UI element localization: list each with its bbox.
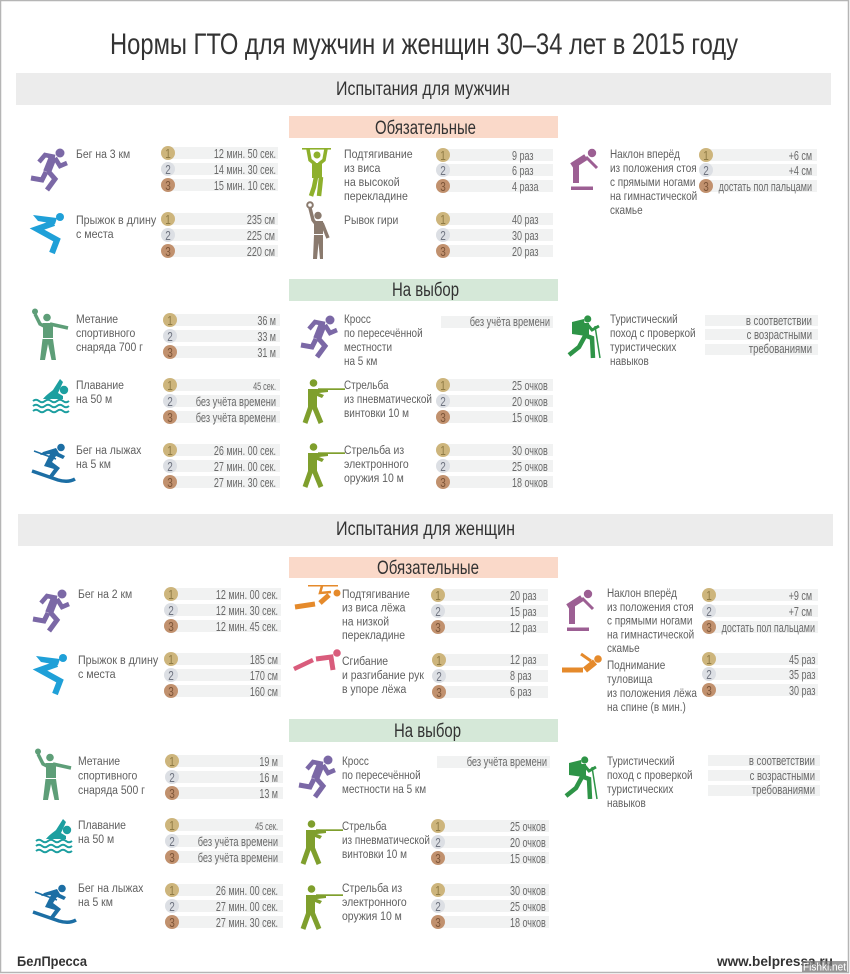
test: low pull-ups women: 3: [435, 622, 441, 635]
test: run 3 km men: Бег на 3 км: [76, 148, 130, 161]
test: cross men: местности: [344, 341, 392, 354]
panel: men header: Испытания для мужчин: [336, 79, 510, 100]
test: push-ups women: 8 раз: [510, 670, 532, 683]
test: air rifle men: [305, 378, 553, 425]
test: long jump women: [36, 652, 281, 699]
test: low pull-ups women: 2: [435, 606, 441, 619]
test: swim men: 2: [167, 396, 173, 409]
test: electronic rifle men: 25 очков: [512, 461, 548, 474]
test: pull-ups men: 2: [440, 165, 446, 178]
test: electronic rifle men: 2: [440, 461, 446, 474]
test: push-ups women: и разгибание рук: [342, 669, 424, 682]
test: bend women: +7 см: [789, 606, 812, 619]
test: long jump men: Прыжок в длину: [76, 214, 156, 227]
test: throw men: 3: [167, 347, 173, 360]
test: electronic rifle men: 1: [440, 445, 446, 458]
test: pull-ups men: [302, 148, 553, 203]
test: low pull-ups women: 15 раз: [510, 606, 537, 619]
test: push-ups women: в упоре лёжа: [342, 683, 407, 696]
test: throw men: 36 м: [257, 315, 276, 328]
test: throw women: 3: [169, 788, 175, 801]
test: sit-ups women: 35 раз: [789, 669, 816, 682]
test: electronic rifle women: [303, 882, 549, 930]
test: throw women: 19 м: [259, 756, 278, 769]
test: electronic rifle women: электронного: [342, 896, 407, 909]
test: run 3 km men: 15 мин. 10 сек.: [214, 180, 276, 193]
test: sit-ups women: 45 раз: [789, 654, 816, 667]
test: electronic rifle women: 25 очков: [510, 901, 546, 914]
test: swim men: [33, 378, 280, 425]
test: pull-ups men: из виса: [344, 162, 381, 175]
test: long jump men: 3: [165, 246, 171, 259]
men optional heading: [289, 279, 558, 301]
test: bend women: на гимнастической: [607, 629, 694, 642]
men optional heading: На выбор: [392, 280, 459, 301]
women mandatory heading: Обязательные: [377, 558, 479, 579]
test: air rifle men: винтовки 10 м: [344, 407, 409, 420]
test: electronic rifle men: [305, 443, 553, 490]
test: ski women: на 5 км: [78, 896, 113, 909]
test: ski women: 27 мин. 30 сек.: [216, 917, 278, 930]
test: swim women: [36, 818, 283, 865]
test: long jump men: с места: [76, 228, 114, 241]
test: air rifle women: Стрельба: [342, 820, 386, 833]
test: throw men: [32, 308, 280, 360]
test: swim men: на 50 м: [76, 393, 112, 406]
test: long jump men: 1: [165, 214, 171, 227]
test: electronic rifle women: Стрельба из: [342, 882, 402, 895]
test: cross women: местности на 5 км: [342, 783, 426, 796]
test: swim women: на 50 м: [78, 833, 114, 846]
test: run 2 km women: 2: [168, 605, 174, 618]
test: low pull-ups women: 12 раз: [510, 622, 537, 635]
test: electronic rifle men: электронного: [344, 458, 409, 471]
test: bend men: 2: [703, 165, 709, 178]
test: air rifle men: 1: [440, 380, 446, 393]
test: run 3 km men: 2: [165, 164, 171, 177]
panel: men header: [16, 73, 831, 105]
test: hiking men: туристических: [610, 341, 677, 354]
test: hiking women: с возрастными: [750, 770, 815, 783]
test: hiking women: поход с проверкой: [607, 769, 693, 782]
test: bend women: +9 см: [789, 590, 812, 603]
icon: push-up: [294, 649, 341, 670]
test: run 2 km women: 3: [168, 621, 174, 634]
test: electronic rifle men: оружия 10 м: [344, 472, 404, 485]
test: run 3 km men: 12 мин. 50 сек.: [214, 148, 276, 161]
test: run 2 km women: 12 мин. 45 сек.: [216, 621, 278, 634]
test: air rifle men: Стрельба: [344, 379, 388, 392]
test: swim women: 1: [169, 820, 175, 833]
test: ski women: 3: [169, 917, 175, 930]
test: long jump men: [33, 212, 278, 259]
test: ski men: Бег на лыжах: [76, 444, 141, 457]
test: ski women: 1: [169, 885, 175, 898]
test: air rifle women: 25 очков: [510, 821, 546, 834]
test: throw men: снаряда 700 г: [76, 341, 143, 354]
test: low pull-ups women: перекладине: [342, 629, 405, 642]
test: air rifle women: 1: [435, 821, 441, 834]
test: bend men: [571, 148, 817, 217]
test: swim women: Плавание: [78, 819, 126, 832]
test: cross women: без учёта времени: [467, 756, 547, 769]
test: hiking men: Туристический: [610, 313, 678, 326]
test: sit-ups women: Поднимание: [607, 659, 665, 672]
test: low pull-ups women: из виса лёжа: [342, 602, 406, 615]
test: air rifle men: 25 очков: [512, 380, 548, 393]
test: bend women: из положения стоя: [607, 601, 694, 614]
watermark: Fishki.net: [803, 962, 846, 974]
test: long jump women: 3: [168, 686, 174, 699]
test: sit-ups women: 1: [706, 654, 712, 667]
test: run 3 km men: 1: [165, 148, 171, 161]
test: hiking women: Туристический: [607, 755, 675, 768]
test: electronic rifle women: 2: [435, 901, 441, 914]
test: throw men: 33 м: [257, 331, 276, 344]
test: pull-ups men: 1: [440, 150, 446, 163]
test: electronic rifle women: 1: [435, 885, 441, 898]
test: low pull-ups women: на низкой: [342, 616, 389, 629]
test: swim men: Плавание: [76, 379, 124, 392]
test: air rifle men: 15 очков: [512, 412, 548, 425]
footer: publisher: БелПресса: [17, 953, 87, 969]
test: electronic rifle women: 3: [435, 917, 441, 930]
test: bend men: +4 см: [789, 165, 812, 178]
test: air rifle women: винтовки 10 м: [342, 848, 407, 861]
test: swim men: 45 сек.: [253, 381, 276, 392]
test: throw women: 2: [169, 772, 175, 785]
test: sit-ups women: 2: [706, 669, 712, 682]
test: electronic rifle men: 3: [440, 477, 446, 490]
test: throw men: 2: [167, 331, 173, 344]
test: bend men: из положения стоя: [610, 162, 697, 175]
test: bend women: [567, 587, 818, 655]
panel: women header: [18, 514, 833, 546]
test: hiking women: требованиями: [752, 784, 815, 797]
test: long jump men: 220 см: [247, 246, 275, 259]
test: ski women: 2: [169, 901, 175, 914]
test: air rifle women: 3: [435, 853, 441, 866]
test: ski men: 2: [167, 461, 173, 474]
test: pull-ups men: 3: [440, 181, 446, 194]
test: ski women: Бег на лыжах: [78, 882, 143, 895]
test: run 2 km women: 1: [168, 589, 174, 602]
test: long jump women: 170 см: [250, 670, 278, 683]
test: low pull-ups women: 20 раз: [510, 590, 537, 603]
test: bend women: 2: [706, 606, 712, 619]
test: hiking men: поход с проверкой: [610, 327, 696, 340]
test: air rifle women: [303, 819, 549, 866]
test: sit-ups women: 30 раз: [789, 685, 816, 698]
test: bend men: Наклон вперёд: [610, 148, 680, 161]
test: cross men: Кросс: [344, 313, 371, 326]
test: bend men: 1: [703, 150, 709, 163]
test: long jump women: 1: [168, 654, 174, 667]
test: bend women: скамье: [607, 642, 640, 655]
test: push-ups women: [294, 649, 548, 700]
test: pull-ups men: перекладине: [344, 190, 408, 203]
test: ski men: 1: [167, 445, 173, 458]
test: kettlebell men: 40 раз: [512, 214, 539, 227]
test: push-ups women: 2: [436, 671, 442, 684]
test: long jump women: с места: [78, 668, 116, 681]
test: air rifle men: из пневматической: [344, 393, 432, 406]
test: swim women: 45 сек.: [255, 821, 278, 832]
test: run 2 km women: [33, 587, 281, 634]
test: ski men: [32, 443, 280, 490]
test: ski men: 26 мин. 00 сек.: [214, 445, 276, 458]
test: sit-ups women: туловища: [607, 673, 653, 686]
test: low pull-ups women: [295, 585, 548, 642]
test: cross men: без учёта времени: [470, 316, 550, 329]
test: electronic rifle men: 30 очков: [512, 445, 548, 458]
test: low pull-ups women: Подтягивание: [342, 588, 410, 601]
test: sit-ups women: [562, 652, 818, 714]
test: kettlebell men: 3: [440, 246, 446, 259]
test: ski women: 26 мин. 00 сек.: [216, 885, 278, 898]
test: hiking men: с возрастными: [747, 329, 812, 342]
test: air rifle women: 20 очков: [510, 837, 546, 850]
test: ski women: 27 мин. 00 сек.: [216, 901, 278, 914]
test: swim women: без учёта времени: [198, 836, 278, 849]
test: air rifle men: 2: [440, 396, 446, 409]
test: ski men: на 5 км: [76, 458, 111, 471]
test: run 2 km women: 12 мин. 30 сек.: [216, 605, 278, 618]
test: long jump women: 185 см: [250, 654, 278, 667]
test: kettlebell men: 1: [440, 214, 446, 227]
men mandatory heading: Обязательные: [375, 118, 476, 139]
test: hiking women: туристических: [607, 783, 674, 796]
test: long jump men: 225 см: [247, 230, 275, 243]
test: electronic rifle women: 30 очков: [510, 885, 546, 898]
men mandatory heading: [289, 116, 558, 139]
test: sit-ups women: на спине (в мин.): [607, 701, 686, 714]
test: hiking men: навыков: [610, 355, 649, 368]
test: cross women: Кросс: [342, 755, 369, 768]
women mandatory heading: [289, 557, 558, 579]
test: bend women: 3: [706, 622, 712, 635]
test: run 3 km men: 3: [165, 180, 171, 193]
test: ski men: 27 мин. 00 сек.: [214, 461, 276, 474]
test: cross women: [299, 755, 550, 797]
test: hiking men: в соответствии: [746, 315, 812, 328]
test: pull-ups men: 9 раз: [512, 150, 534, 163]
test: long jump women: 2: [168, 670, 174, 683]
test: pull-ups men: на высокой: [344, 176, 400, 189]
test: hiking women: [566, 755, 820, 810]
test: pull-ups men: 6 раз: [512, 165, 534, 178]
test: swim women: 2: [169, 836, 175, 849]
test: run 2 km women: 12 мин. 00 сек.: [216, 589, 278, 602]
test: pull-ups men: 4 раза: [512, 181, 539, 194]
test: push-ups women: 12 раз: [510, 654, 537, 667]
test: swim men: без учёта времени: [196, 412, 276, 425]
test: long jump women: 160 см: [250, 686, 278, 699]
test: ski women: [33, 882, 283, 930]
test: electronic rifle women: оружия 10 м: [342, 910, 402, 923]
test: throw women: [35, 748, 283, 801]
test: swim men: 3: [167, 412, 173, 425]
test: kettlebell men: Рывок гири: [344, 214, 398, 227]
test: bend men: с прямыми ногами: [610, 176, 695, 189]
test: ski men: 3: [167, 477, 173, 490]
test: run 2 km women: Бег на 2 км: [78, 588, 132, 601]
test: swim women: 3: [169, 852, 175, 865]
test: hiking women: навыков: [607, 797, 646, 810]
test: hiking women: в соответствии: [749, 755, 815, 768]
test: air rifle women: 2: [435, 837, 441, 850]
women optional heading: [289, 719, 558, 742]
test: throw women: Метание: [78, 755, 120, 768]
test: push-ups women: 6 раз: [510, 686, 532, 699]
test: air rifle women: 15 очков: [510, 853, 546, 866]
test: bend women: с прямыми ногами: [607, 615, 692, 628]
test: run 3 km men: 14 мин. 30 сек.: [214, 164, 276, 177]
test: hiking men: [569, 313, 818, 368]
test: throw men: 31 м: [257, 347, 276, 360]
test: bend women: 1: [706, 590, 712, 603]
test: throw men: 1: [167, 315, 173, 328]
test: bend men: +6 см: [789, 150, 812, 163]
panel: women header: Испытания для женщин: [336, 519, 515, 540]
test: cross men: по пересечённой: [344, 327, 423, 340]
test: bend men: скамье: [610, 204, 643, 217]
test: bend women: достать пол пальцами: [722, 622, 815, 635]
test: cross men: [301, 313, 553, 368]
test: swim men: 1: [167, 380, 173, 393]
test: throw men: Метание: [76, 313, 118, 326]
icon: sit-up: [562, 654, 602, 670]
test: push-ups women: 1: [436, 655, 442, 668]
test: push-ups women: 3: [436, 687, 442, 700]
test: electronic rifle women: 18 очков: [510, 917, 546, 930]
women optional heading: На выбор: [394, 721, 461, 742]
test: hiking men: требованиями: [749, 343, 812, 356]
icon: low bar pull-up: [295, 585, 340, 607]
test: cross men: на 5 км: [344, 355, 377, 368]
test: throw women: снаряда 500 г: [78, 784, 145, 797]
test: throw women: 13 м: [259, 788, 278, 801]
test: sit-ups women: из положения лёжа: [607, 687, 698, 700]
footer: website: www.belpressa.ru: [716, 953, 833, 969]
test: throw women: 16 м: [259, 772, 278, 785]
test: kettlebell men: 30 раз: [512, 230, 539, 243]
test: kettlebell men: 2: [440, 230, 446, 243]
test: long jump women: Прыжок в длину: [78, 654, 158, 667]
test: swim men: без учёта времени: [196, 396, 276, 409]
test: kettlebell men: [307, 202, 553, 259]
test: swim women: без учёта времени: [198, 852, 278, 865]
test: pull-ups men: Подтягивание: [344, 148, 413, 161]
test: long jump men: 2: [165, 230, 171, 243]
test: throw women: спортивного: [78, 770, 137, 783]
test: throw women: 1: [169, 756, 175, 769]
test: cross women: по пересечённой: [342, 769, 421, 782]
test: air rifle men: 20 очков: [512, 396, 548, 409]
test: low pull-ups women: 1: [435, 590, 441, 603]
test: bend men: достать пол пальцами: [719, 181, 812, 194]
test: kettlebell men: 20 раз: [512, 246, 539, 259]
test: bend men: на гимнастической: [610, 190, 697, 203]
test: long jump men: 235 см: [247, 214, 275, 227]
test: sit-ups women: 3: [706, 685, 712, 698]
test: run 3 km men: [31, 146, 278, 193]
test: electronic rifle men: Стрельба из: [344, 444, 404, 457]
test: electronic rifle men: 18 очков: [512, 477, 548, 490]
test: push-ups women: Сгибание: [342, 655, 388, 668]
test: air rifle women: из пневматической: [342, 834, 430, 847]
test: air rifle men: 3: [440, 412, 446, 425]
test: ski men: 27 мин. 30 сек.: [214, 477, 276, 490]
test: throw men: спортивного: [76, 327, 135, 340]
test: bend men: 3: [703, 181, 709, 194]
test: bend women: Наклон вперёд: [607, 587, 677, 600]
